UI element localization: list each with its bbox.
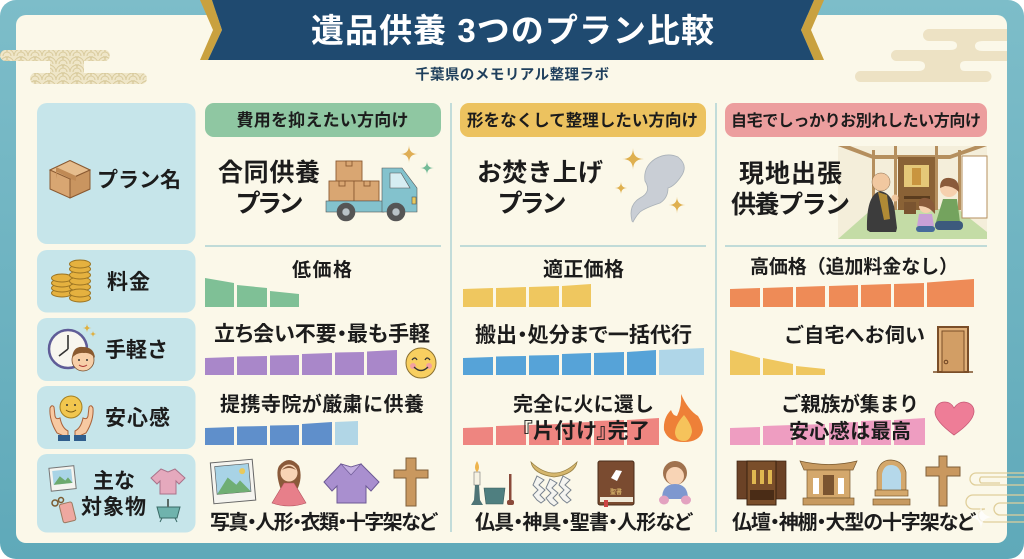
child — [916, 198, 935, 232]
banner navy — [208, 0, 814, 60]
audience pill — [725, 103, 987, 137]
divider line — [205, 245, 441, 247]
reassurance text — [781, 392, 919, 443]
items text: 写真・人形・衣類・十字架など — [210, 511, 438, 534]
reassurance bar — [205, 421, 358, 445]
altar — [898, 157, 935, 214]
pill text: 形をなくして整理したい方向け — [467, 110, 698, 130]
label text — [81, 470, 146, 519]
room floor — [838, 209, 987, 239]
label text: 手軽さ — [105, 339, 168, 362]
price bar — [463, 284, 591, 307]
icon: small censer — [157, 499, 180, 522]
reassurance text: 『片付け』完了 — [522, 420, 650, 443]
audience pill — [205, 103, 441, 137]
decoration: patterned cloud left — [0, 50, 147, 84]
icon: kamidana — [800, 461, 857, 505]
reassurance text: 提携寺院が厳粛に供養 — [220, 392, 424, 416]
pill text: 自宅でしっかりお別れしたい方向け — [731, 111, 981, 130]
monk — [867, 173, 898, 232]
icon: cross — [926, 456, 960, 506]
audience pill — [460, 103, 706, 137]
plan name: 現地出張 — [739, 160, 842, 188]
reassurance bar — [730, 418, 925, 445]
row label: price — [37, 250, 196, 312]
ease bar — [463, 348, 704, 375]
icon: doll — [272, 460, 306, 506]
decoration: cloud right — [855, 29, 1007, 82]
reassurance bar — [463, 418, 659, 445]
plan name — [477, 159, 603, 218]
icon: bible — [598, 461, 634, 507]
icon: small bottle — [52, 498, 76, 523]
items text: 仏具・神具・聖書・人形など — [475, 511, 693, 534]
ease bar — [205, 350, 397, 375]
plan name: 合同供養 — [218, 159, 320, 187]
price text: 高価格（追加料金なし） — [750, 256, 958, 278]
title: 遺品供養 3つのプラン比較 — [311, 12, 714, 49]
icon: sparkles — [614, 148, 686, 214]
subtitle: 千葉県のメモリアル整理ラボ — [415, 66, 610, 84]
reassurance text: ご親族が集まり — [781, 392, 919, 416]
reassurance text: 完全に火に還し — [513, 393, 654, 416]
icon: cardboard box — [50, 160, 90, 198]
plan name: プラン — [498, 190, 566, 218]
icon: clock and boy — [49, 324, 96, 371]
plan name — [731, 160, 850, 219]
banner gold ends — [200, 0, 222, 60]
divider line — [460, 245, 706, 247]
icon: truck with boxes — [326, 161, 417, 221]
column 3: on-site memorial plan — [725, 103, 987, 534]
plan name: プラン — [236, 190, 304, 218]
icon: photo — [210, 459, 256, 504]
icon: hands with smile — [50, 396, 93, 441]
reassurance text: 安心感は最高 — [789, 419, 911, 443]
items text: 仏壇・神棚・大型の十字架など — [732, 511, 976, 534]
label text: 対象物 — [81, 496, 146, 519]
title banner — [200, 0, 824, 60]
decoration: white sparkle — [968, 504, 994, 530]
column 2: cremation plan — [460, 103, 706, 534]
row label: target items — [37, 454, 196, 532]
row label: reassurance — [37, 386, 196, 449]
ease text: ご自宅へお伺い — [784, 323, 925, 347]
row label: ease — [37, 318, 196, 381]
row label: plan name — [37, 103, 196, 244]
icon: sparkles — [400, 145, 434, 175]
ease bar — [730, 350, 825, 375]
plan name — [218, 159, 320, 218]
column 1: joint memorial plan — [205, 103, 441, 534]
reassurance text — [513, 393, 654, 443]
label text: プラン名 — [97, 169, 181, 192]
icon: coins — [52, 260, 90, 302]
icon: candle and incense bowl — [471, 461, 514, 505]
icon: bible: 聖書 — [610, 488, 622, 496]
plan name: 供養プラン — [731, 191, 850, 219]
icon: small shirt — [151, 469, 185, 494]
parent — [935, 178, 963, 230]
label text: 安心感 — [105, 406, 170, 430]
column dividers — [451, 103, 716, 532]
icon: heart — [935, 402, 974, 435]
divider line — [725, 245, 987, 247]
price bar — [205, 278, 299, 307]
icon: smoke — [631, 155, 684, 222]
icon: baby doll — [659, 461, 691, 504]
icon: flame — [664, 394, 703, 442]
icon: door — [933, 327, 973, 372]
icon: small photo — [49, 466, 76, 491]
price text: 低価格 — [292, 259, 352, 281]
icon: butsudan — [737, 461, 786, 505]
pill text: 費用を抑えたい方向け — [236, 110, 408, 130]
price bar — [730, 279, 974, 307]
decoration: wave lines bottom right — [966, 473, 1024, 522]
icon: cross — [394, 458, 428, 506]
label text: 主な — [93, 470, 135, 493]
ease text: 搬出・処分まで一括代行 — [475, 324, 692, 347]
icon: shirt — [324, 464, 379, 503]
price text: 適正価格 — [543, 258, 624, 281]
icon: shimenawa — [531, 462, 577, 506]
ease text: 立ち会い不要・最も手軽 — [214, 323, 430, 346]
plan name: お焚き上げ — [477, 159, 603, 187]
illustration: room with monk and family — [838, 146, 987, 239]
icon: smile — [406, 348, 436, 378]
icon: mirror — [873, 460, 910, 505]
label text: 料金 — [107, 271, 150, 294]
